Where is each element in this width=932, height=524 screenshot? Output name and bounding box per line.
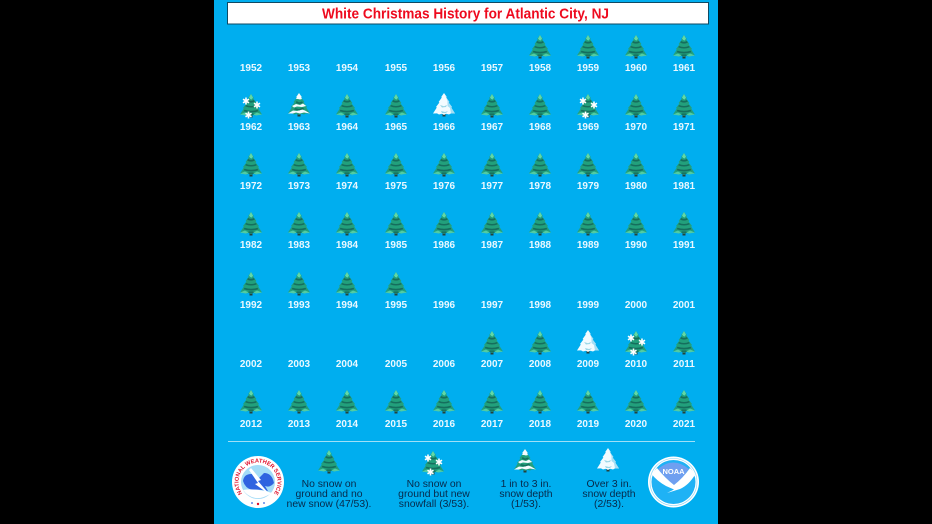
icon: green tree <box>318 450 340 474</box>
2001: 2001 <box>673 300 696 311</box>
1980: 1980 <box>625 181 648 192</box>
2010 <box>625 331 648 370</box>
2007: 2007 <box>481 359 504 370</box>
icon: tree with snowflakes <box>422 451 444 476</box>
2010: 2010 <box>625 359 648 370</box>
1978 <box>529 153 552 192</box>
legend text: 1 to 3 inches: snow depth <box>499 489 553 500</box>
year grid <box>240 35 696 430</box>
1976 <box>433 153 456 192</box>
1978: 1978 <box>529 181 552 192</box>
2013 <box>288 390 311 430</box>
2015: 2015 <box>385 419 408 430</box>
1985: 1985 <box>385 240 408 251</box>
1966 <box>433 93 456 133</box>
1968: 1968 <box>529 122 552 133</box>
1961: 1961 <box>673 63 696 74</box>
1953: 1953 <box>288 63 311 74</box>
1983 <box>288 212 311 251</box>
1982: 1982 <box>240 240 263 251</box>
icon: NOAA logo: NOAA <box>662 467 685 476</box>
2008 <box>529 331 552 370</box>
2016 <box>433 390 456 430</box>
1969 <box>577 94 600 133</box>
1977 <box>481 153 504 192</box>
1972 <box>240 153 263 192</box>
1954: 1954 <box>336 63 359 74</box>
1981: 1981 <box>673 181 696 192</box>
1969: 1969 <box>577 122 600 133</box>
2004: 2004 <box>336 359 359 370</box>
1964 <box>336 94 359 133</box>
2020: 2020 <box>625 419 648 430</box>
1999: 1999 <box>577 300 600 311</box>
legend text: no snow: new snow (47/53). <box>287 499 371 510</box>
1986: 1986 <box>433 240 456 251</box>
2013: 2013 <box>288 419 311 430</box>
1985 <box>385 212 408 251</box>
1959: 1959 <box>577 63 600 74</box>
1967 <box>481 94 504 133</box>
2014 <box>336 390 359 430</box>
1991 <box>673 212 696 251</box>
1987 <box>481 212 504 251</box>
1988: 1988 <box>529 240 552 251</box>
1993 <box>288 272 311 311</box>
1986 <box>433 212 456 251</box>
2019 <box>577 390 600 430</box>
1971: 1971 <box>673 122 696 133</box>
legend: over 3 inches <box>582 448 636 510</box>
icon: NOAA logo <box>648 456 699 508</box>
2012: 2012 <box>240 419 263 430</box>
2017: 2017 <box>481 419 504 430</box>
1975 <box>385 153 408 192</box>
1957: 1957 <box>481 63 504 74</box>
legend text: no snow: ground and no <box>295 489 363 500</box>
1995 <box>385 272 408 311</box>
1982 <box>240 212 263 251</box>
1973: 1973 <box>288 181 311 192</box>
2011 <box>673 331 695 370</box>
1977: 1977 <box>481 181 504 192</box>
1993: 1993 <box>288 300 311 311</box>
2007 <box>481 331 504 370</box>
1984: 1984 <box>336 240 359 251</box>
2000: 2000 <box>625 300 648 311</box>
2002: 2002 <box>240 359 263 370</box>
2021: 2021 <box>673 419 696 430</box>
1976: 1976 <box>433 181 456 192</box>
1968 <box>529 94 552 133</box>
legend text: no snow: No snow on <box>302 479 357 490</box>
legend: no snow <box>287 450 371 510</box>
1974 <box>336 153 359 192</box>
1992 <box>240 272 263 311</box>
1965 <box>385 94 408 133</box>
1971 <box>673 94 696 133</box>
1958 <box>529 35 552 74</box>
1984 <box>336 212 359 251</box>
legend text: over 3 inches: (2/53). <box>594 499 624 510</box>
1966: 1966 <box>433 122 456 133</box>
2009 <box>577 330 600 370</box>
1972: 1972 <box>240 181 263 192</box>
1981 <box>673 153 696 192</box>
1996: 1996 <box>433 300 456 311</box>
1980 <box>625 153 648 192</box>
icon: snow-covered tree <box>597 448 619 472</box>
1983: 1983 <box>288 240 311 251</box>
2016: 2016 <box>433 419 456 430</box>
1963 <box>288 93 311 133</box>
1975: 1975 <box>385 181 408 192</box>
2017 <box>481 390 504 430</box>
legend text: over 3 inches: snow depth <box>582 489 636 500</box>
1987: 1987 <box>481 240 504 251</box>
1960 <box>625 35 648 74</box>
1997: 1997 <box>481 300 504 311</box>
2005: 2005 <box>385 359 408 370</box>
1964: 1964 <box>336 122 359 133</box>
icon: National Weather Service logo <box>232 456 284 508</box>
1998: 1998 <box>529 300 552 311</box>
2003: 2003 <box>288 359 311 370</box>
legend text: 1 to 3 inches: 1 in to 3 in. <box>501 479 551 490</box>
1967: 1967 <box>481 122 504 133</box>
panel: infographic background <box>214 0 718 524</box>
legend: new snowfall <box>398 451 470 510</box>
1979 <box>577 153 600 192</box>
1989: 1989 <box>577 240 600 251</box>
legend text: new snowfall: ground but new <box>398 489 470 500</box>
1989 <box>577 212 600 251</box>
1990 <box>625 212 648 251</box>
2006: 2006 <box>433 359 456 370</box>
icon: National Weather Service logo: NATIONAL WEATHER SERVICE <box>234 458 282 496</box>
1959 <box>577 35 600 74</box>
2019: 2019 <box>577 419 600 430</box>
2015 <box>385 390 408 430</box>
1974: 1974 <box>336 181 359 192</box>
1958: 1958 <box>529 63 552 74</box>
title: White Christmas History for Atlantic City, NJ <box>322 6 609 22</box>
legend text: new snowfall: No snow on <box>407 479 462 490</box>
1991: 1991 <box>673 240 696 251</box>
2012 <box>240 390 263 430</box>
2008: 2008 <box>529 359 552 370</box>
icon: snow-dusted tree <box>514 449 536 472</box>
1992: 1992 <box>240 300 263 311</box>
1962 <box>240 94 263 133</box>
legend text: over 3 inches: Over 3 in. <box>586 479 632 490</box>
1965: 1965 <box>385 122 408 133</box>
1962: 1962 <box>240 122 263 133</box>
2009: 2009 <box>577 359 600 370</box>
1973 <box>288 153 311 192</box>
2018: 2018 <box>529 419 552 430</box>
1970: 1970 <box>625 122 648 133</box>
legend text: new snowfall: snowfall (3/53). <box>399 499 469 510</box>
1990: 1990 <box>625 240 648 251</box>
legend text: 1 to 3 inches: (1/53). <box>511 499 541 510</box>
1994 <box>336 272 359 311</box>
1994: 1994 <box>336 300 359 311</box>
2014: 2014 <box>336 419 359 430</box>
1963: 1963 <box>288 122 311 133</box>
1988 <box>529 212 552 251</box>
1952: 1952 <box>240 63 263 74</box>
1995: 1995 <box>385 300 408 311</box>
2021 <box>673 390 696 430</box>
legend: 1 to 3 inches <box>499 449 553 510</box>
1961 <box>673 35 696 74</box>
1960: 1960 <box>625 63 648 74</box>
1956: 1956 <box>433 63 456 74</box>
1970 <box>625 94 648 133</box>
1979: 1979 <box>577 181 600 192</box>
2020 <box>625 390 648 430</box>
2018 <box>529 390 552 430</box>
1955: 1955 <box>385 63 408 74</box>
title <box>228 2 708 24</box>
2011: 2011 <box>673 359 695 370</box>
